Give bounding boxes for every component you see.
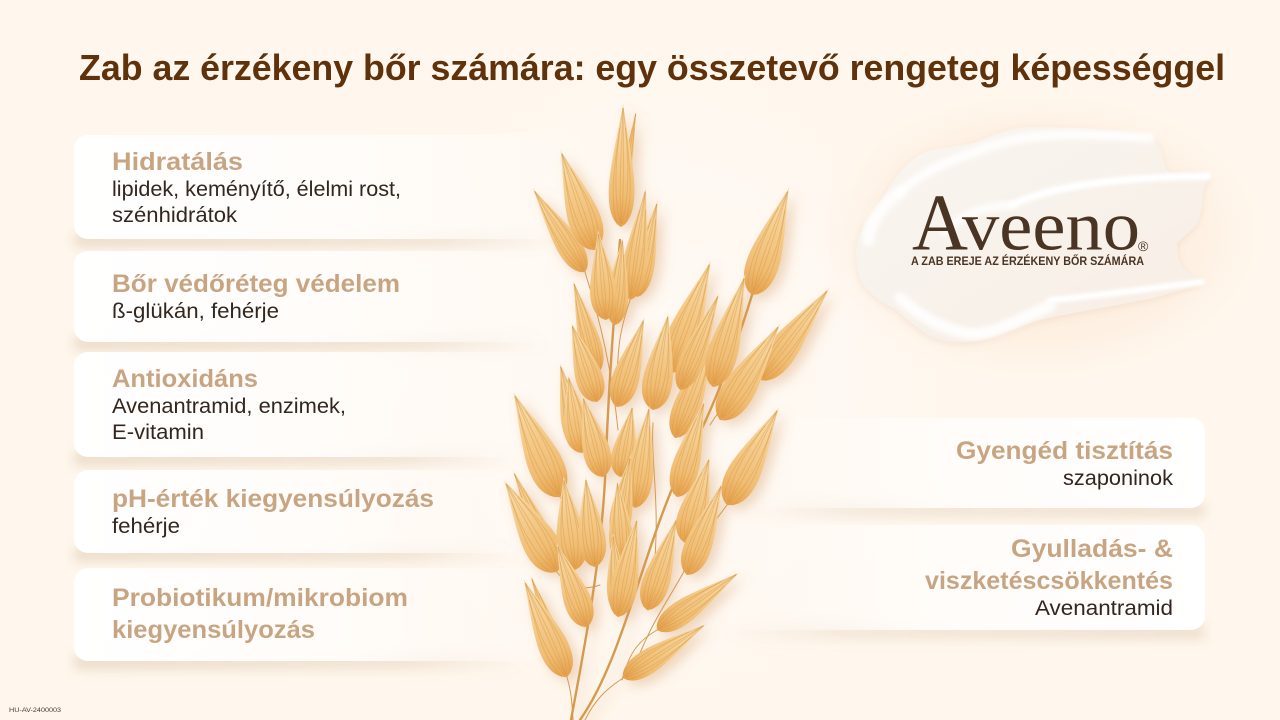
text: Hidratálás ingredients: lipidek, keményítő, élelmi rost,	[112, 178, 401, 201]
cream swatch glow	[815, 90, 1265, 380]
logo: Aveeno: veeno	[962, 188, 1140, 266]
text: Antioxidáns ingredients	[112, 395, 346, 444]
panel: Gyulladás- és viszketéscsökkentés	[722, 525, 1205, 639]
heading: Antioxidáns: Antioxidáns	[112, 365, 258, 393]
panel: Antioxidáns	[74, 352, 530, 465]
heading: Gyulladás- & viszketéscsökkentés: viszketéscsökkentés	[925, 567, 1173, 595]
logo: Aveeno: ®	[1138, 238, 1149, 254]
text: Antioxidáns ingredients: E-vitamin	[112, 421, 204, 444]
heading: Probiotikum/mikrobiom kiegyensúlyozás: Probiotikum/mikrobiom	[112, 584, 408, 612]
logo: Aveeno	[912, 180, 1149, 268]
panel: Gyengéd tisztítás	[745, 418, 1205, 517]
panel: pH-érték kiegyensúlyozás	[74, 470, 526, 561]
title: Zab az érzékeny bőr számára: egy összetevő rengeteg képességgel	[79, 47, 1225, 88]
footnote code: HU-AV-2400003	[9, 708, 62, 714]
logo: Aveeno: A	[912, 180, 968, 268]
heading: Probiotikum/mikrobiom kiegyensúlyozás	[112, 584, 408, 644]
heading: Bőr védőréteg védelem: Bőr védőréteg védelem	[112, 270, 400, 298]
panel: Bőr védőréteg védelem	[74, 251, 564, 350]
heading: Gyulladás- & viszketéscsökkentés	[925, 535, 1173, 595]
heading: pH-érték kiegyensúlyozás: pH-érték kiegyensúlyozás	[112, 485, 434, 513]
text: Antioxidáns ingredients: Avenantramid, enzimek,	[112, 395, 346, 418]
heading: Gyengéd tisztítás: Gyengéd tisztítás	[956, 437, 1173, 465]
cream highlights	[868, 135, 1208, 334]
illustration: oat stalk	[489, 103, 842, 720]
text: Hidratálás ingredients	[112, 178, 401, 227]
heading: Hidratálás: Hidratálás	[112, 148, 243, 176]
heading: Gyulladás- & viszketéscsökkentés: Gyulladás- &	[1011, 535, 1173, 563]
panel: Hidratálás	[74, 135, 584, 247]
text: pH ingredients: fehérje	[112, 515, 180, 538]
illustration: cream smear	[856, 127, 1212, 342]
text: Gyulladás ingredient: Avenantramid	[1035, 597, 1173, 620]
text: Bőr védőréteg ingredients: ß-glükán, fehérje	[112, 300, 279, 323]
text: Hidratálás ingredients: szénhidrátok	[112, 204, 238, 227]
grains	[489, 103, 842, 688]
panel: Probiotikum/mikrobiom	[74, 568, 544, 669]
heading: Probiotikum/mikrobiom kiegyensúlyozás: kiegyensúlyozás	[112, 616, 315, 644]
text: Gyengéd tisztítás ingredient: szaponinok	[1063, 467, 1174, 490]
tagline: A ZAB EREJE AZ ÉRZÉKENY BŐR SZÁMÁRA	[911, 255, 1144, 268]
